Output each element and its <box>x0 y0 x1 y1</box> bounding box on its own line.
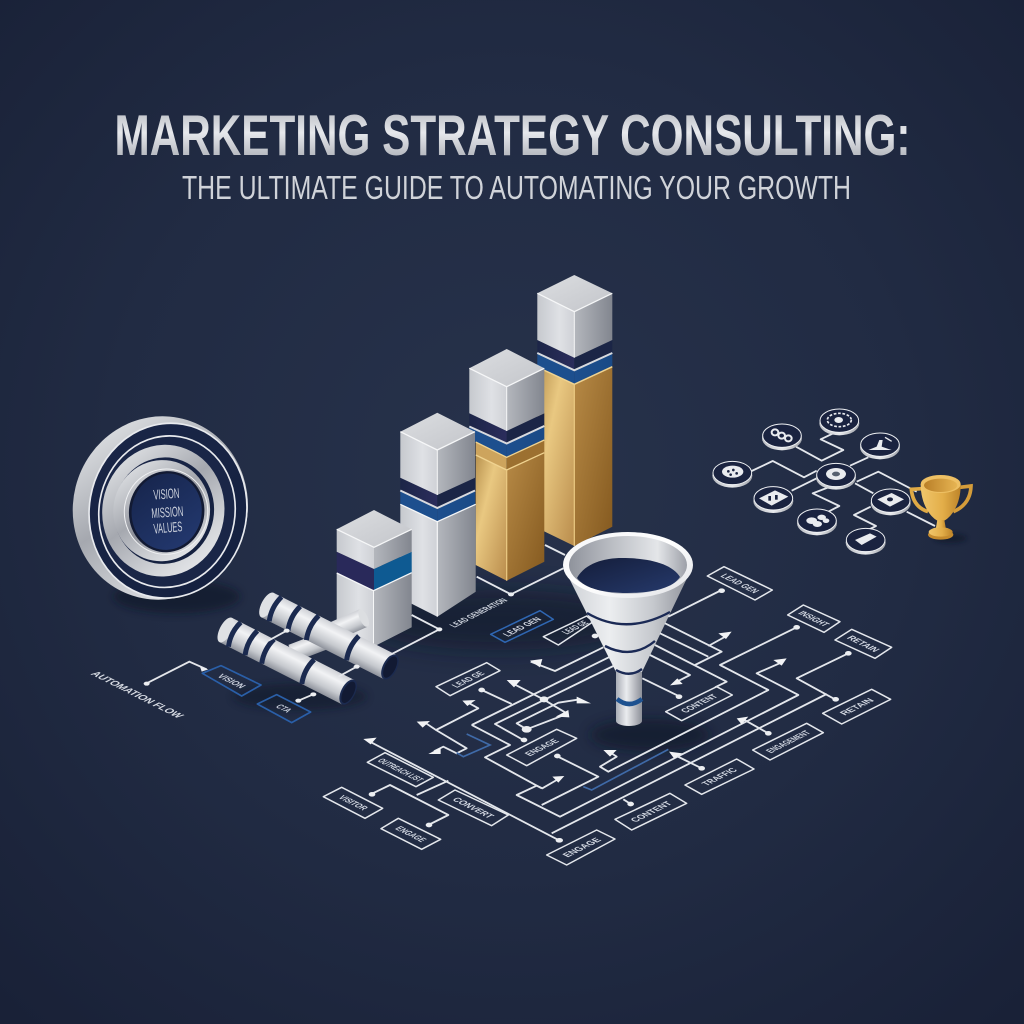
ring label text: VALUES <box>153 518 183 537</box>
boxes and labels <box>323 567 892 865</box>
automation flow circuit diagram: RETAIN <box>844 635 881 654</box>
funnel <box>563 532 710 751</box>
pipe connectors <box>147 631 357 701</box>
box: cta: CTA <box>273 704 294 714</box>
cross pipe upper <box>331 607 371 639</box>
box: vision <box>202 666 261 696</box>
automation flow circuit diagram: CONTENT <box>679 693 721 714</box>
automation flow circuit diagram: ENGAGE <box>561 837 604 859</box>
pipes and automation flow labels <box>88 590 402 723</box>
box: vision: VISION <box>214 673 247 690</box>
automation flow circuit diagram: CONVERT <box>449 797 496 820</box>
automation flow circuit diagram: ENGAGEMENT <box>764 730 814 755</box>
box: cta <box>257 695 311 723</box>
circuit lines <box>367 545 848 840</box>
node discs <box>712 409 911 555</box>
ring label text <box>151 485 184 537</box>
pipe lower <box>214 615 361 707</box>
automation flow circuit diagram: OUTREACH LIST <box>374 758 425 783</box>
node icons <box>722 413 904 545</box>
arrowheads <box>363 632 787 783</box>
automation flow circuit diagram: LEAD GEN <box>501 616 544 638</box>
blue accent lines <box>457 734 668 790</box>
automation flow circuit diagram: CONTENT <box>629 800 675 824</box>
bar 3 <box>469 349 544 581</box>
automation flow circuit diagram: ENGAGE <box>392 825 428 844</box>
automation flow circuit diagram: LEAD GEN <box>717 573 761 595</box>
automation flow circuit diagram: INSIGHT <box>795 610 831 628</box>
ring label text: MISSION <box>151 503 184 521</box>
bar 4 <box>537 275 612 546</box>
bar 1 <box>337 510 412 647</box>
automation flow circuit diagram: VISITOR <box>335 795 370 812</box>
network of icon nodes <box>712 409 971 555</box>
automation flow circuit diagram: LEAD GE <box>560 620 592 636</box>
ring label text: VISION <box>153 485 180 503</box>
automation flow label: AUTOMATION FLOW <box>88 670 186 720</box>
circular diagram: vision mission values <box>53 398 267 618</box>
cross pipe lower <box>288 629 335 662</box>
dots <box>369 588 852 843</box>
bar chart: four isometric bars <box>337 275 640 650</box>
automation flow circuit diagram <box>323 545 892 865</box>
automation flow circuit diagram: RETAIN <box>838 697 877 717</box>
automation flow circuit diagram: LEAD GENERATION <box>448 597 510 629</box>
icon: trophy <box>911 475 971 543</box>
pipe upper <box>256 590 402 682</box>
bar 2 <box>400 413 476 617</box>
automation flow circuit diagram: ENGAGE <box>523 738 562 758</box>
automation flow circuit diagram: LEAD GE <box>450 670 488 689</box>
automation flow circuit diagram: TRAFFIC <box>700 767 741 787</box>
network lines <box>752 433 935 531</box>
